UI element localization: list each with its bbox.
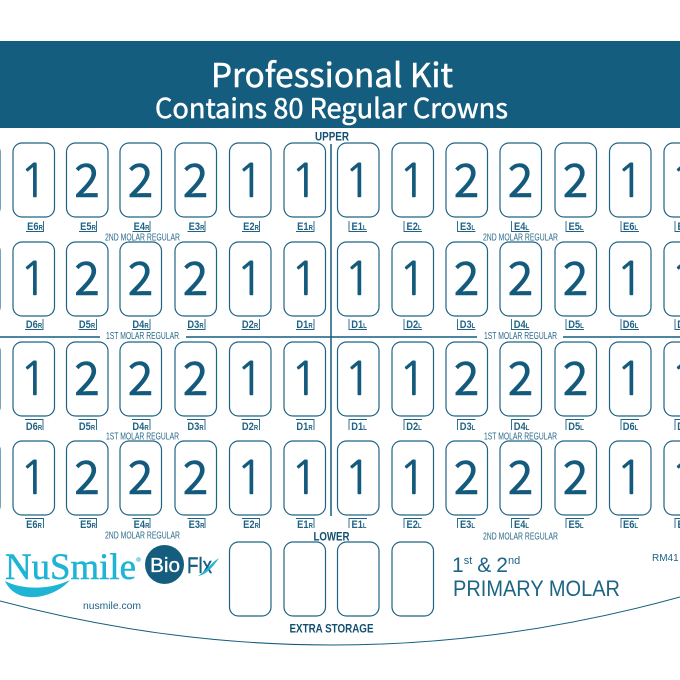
slot D2L: D2L <box>406 421 422 433</box>
slot D4L: 2 <box>508 243 533 309</box>
slot E6L <box>610 143 651 233</box>
slot D6R: 1 <box>20 356 47 402</box>
logo: BioFlx: Flx <box>187 553 212 578</box>
slot E2R: E2R <box>243 221 259 233</box>
molar label row 1 left: 2ND MOLAR REGULAR <box>105 232 180 244</box>
slot E5R: 2 <box>74 145 100 211</box>
slot E3R: E3R <box>189 519 205 531</box>
slot D3R <box>175 242 216 331</box>
slot E5R: E5R <box>80 221 96 233</box>
slot D2R: 1 <box>236 356 264 402</box>
product heading: nd <box>508 555 520 567</box>
slot D3R: D3R <box>187 421 204 433</box>
slot E1L: E1L <box>351 221 367 233</box>
slot D5L: 2 <box>563 343 588 409</box>
slot E5L: E5L <box>568 519 584 531</box>
slot D4R: D4R <box>132 421 149 433</box>
slot E6R <box>13 441 54 531</box>
slot right partial <box>664 441 680 531</box>
slot D1R <box>284 342 326 433</box>
logo: NuSmile: NuSmile <box>5 547 136 588</box>
slot D2L: 1 <box>399 356 426 402</box>
slot E3L: 2 <box>454 442 479 508</box>
slot D4R <box>120 342 162 433</box>
header banner <box>0 41 680 128</box>
slot D4R <box>120 242 162 331</box>
slot D3L <box>446 242 488 331</box>
molar label row 4 left: 2ND MOLAR REGULAR <box>105 530 180 542</box>
slot E4R: 2 <box>128 442 153 508</box>
slot E3L: E3L <box>460 221 475 233</box>
slot E3L: 2 <box>454 145 479 211</box>
slot E6R: E6R <box>26 519 42 531</box>
slot E4R: E4R <box>134 519 150 531</box>
slot D5R <box>66 342 108 433</box>
slot E2L <box>392 441 434 531</box>
molar label row 4 right: 2ND MOLAR REGULAR <box>483 532 558 542</box>
slot D3R: 2 <box>183 243 208 309</box>
extra storage label: EXTRA STORAGE <box>290 622 374 636</box>
slot D5L <box>555 242 596 331</box>
slot E5L: 2 <box>563 145 588 211</box>
slot E3L: E3L <box>460 519 475 531</box>
slot E5R: E5R <box>80 519 96 531</box>
slot E4L: 2 <box>508 442 533 508</box>
slot E5R <box>66 143 108 233</box>
slot D1R: D1R <box>296 319 313 331</box>
slot E1R: E1R <box>297 519 313 531</box>
slot D2R <box>230 242 271 331</box>
slot E1L: 1 <box>344 455 372 501</box>
slot E5L <box>555 143 596 233</box>
slot E1L <box>338 441 379 531</box>
slot D4L: 2 <box>508 343 533 409</box>
slot D4L <box>500 242 542 331</box>
website: nusmile.com <box>83 601 141 612</box>
product heading <box>452 554 620 601</box>
slot E1L: 1 <box>344 158 372 204</box>
slot E5R: 2 <box>74 442 100 508</box>
slot D5R: D5R <box>79 421 95 433</box>
slot D1L <box>338 342 379 433</box>
slot D1L <box>338 242 379 331</box>
slot E6L: E6L <box>623 519 638 531</box>
slot D6R: 1 <box>20 256 47 302</box>
slot D6R: D6R <box>26 319 42 331</box>
slot D5R: 2 <box>74 343 100 409</box>
slot D2R: D2R <box>242 421 258 433</box>
slot D6R: D6R <box>26 421 42 433</box>
slot D1L: D1L <box>351 421 367 433</box>
slot E4R <box>120 441 162 531</box>
slot D4R: D4R <box>132 319 149 331</box>
slot D4R: 2 <box>128 343 153 409</box>
slot E3L <box>446 143 488 233</box>
slot E2L: E2L <box>406 221 422 233</box>
slot E4R: 2 <box>128 145 153 211</box>
slot D1L: 1 <box>344 356 372 402</box>
slot E2L <box>392 143 434 233</box>
slot D5R: D5R <box>79 319 95 331</box>
slot E4L <box>500 441 542 531</box>
molar label row 3 left: 1ST MOLAR REGULAR <box>106 432 179 442</box>
slot E2R <box>230 441 271 531</box>
row 1: E upper <box>0 143 680 233</box>
slot D3R: 2 <box>183 343 208 409</box>
molar label row 2 left: 1ST MOLAR REGULAR <box>106 331 179 342</box>
slot D4L: D4L <box>514 421 529 433</box>
slot D2L <box>392 342 434 433</box>
logo: BioFlx <box>145 545 219 584</box>
slot E6L: 1 <box>616 455 644 501</box>
slot E3R: 2 <box>183 145 208 211</box>
slot D6L: D6L <box>623 421 638 433</box>
slot D6L: D6L <box>623 319 638 331</box>
slot E4L: E4L <box>514 519 529 531</box>
slot E4R <box>120 143 162 233</box>
slot E5R <box>66 441 108 531</box>
slot E3R <box>175 441 216 531</box>
slot E2L: 1 <box>399 455 426 501</box>
slot D2L <box>392 242 434 331</box>
slot D6R <box>13 342 54 433</box>
slot E3R: E3R <box>189 221 205 233</box>
slot D1R: D1R <box>296 421 313 433</box>
slot D5R <box>66 242 108 331</box>
slot E3L <box>446 441 488 531</box>
subtitle: Contains 80 Regular Crowns <box>155 87 508 126</box>
slot E1R <box>284 441 326 531</box>
primary molar: PRIMARY MOLAR <box>453 576 620 601</box>
slot D4L: D4L <box>514 319 529 331</box>
product heading: st <box>464 555 472 567</box>
lower label: LOWER <box>314 530 350 544</box>
slot D5L: 2 <box>563 243 588 309</box>
slot E6L: 1 <box>616 158 644 204</box>
slot E5L: 2 <box>563 442 588 508</box>
slot D2R: D2R <box>242 319 258 331</box>
slot D2L: D2L <box>406 319 422 331</box>
slot D2R: 1 <box>236 256 264 302</box>
slot D6L <box>610 242 651 331</box>
slot right partial <box>664 242 680 331</box>
slot D3L: D3L <box>460 319 475 331</box>
slot right partial <box>664 342 680 433</box>
slot E4R: E4R <box>134 221 150 233</box>
bottom curve <box>0 597 680 645</box>
slot E4L: 2 <box>508 145 533 211</box>
slot E6L: E6L <box>623 221 638 233</box>
slot E2L: 1 <box>399 158 426 204</box>
slot D4L <box>500 342 542 433</box>
slot E5L: E5L <box>568 221 584 233</box>
slot E6R: 1 <box>20 455 47 501</box>
slot D5R: 2 <box>74 243 100 309</box>
registered mark <box>136 557 141 562</box>
slot D5L: D5L <box>568 421 584 433</box>
slot E1R: 1 <box>291 455 318 501</box>
slot D3L <box>446 342 488 433</box>
slot D4R: 2 <box>128 243 153 309</box>
slot D6L: 1 <box>616 256 644 302</box>
slot E1L <box>338 143 379 233</box>
product heading: 2 <box>496 554 508 577</box>
molar label row 3 right: 1ST MOLAR REGULAR <box>484 432 557 442</box>
slot E3R: 2 <box>183 442 208 508</box>
slot right partial <box>664 143 680 233</box>
slot E3R <box>175 143 216 233</box>
row 3: D lower <box>0 342 680 433</box>
row 4: E lower <box>0 441 680 531</box>
slot E2R: E2R <box>243 519 259 531</box>
slot D1R: 1 <box>291 356 318 402</box>
slot E1L: E1L <box>351 519 367 531</box>
slot E1R: E1R <box>297 221 313 233</box>
slot D1L: D1L <box>351 319 367 331</box>
title: Professional Kit <box>211 49 453 97</box>
slot D3L: D3L <box>460 421 475 433</box>
logo smile swoosh <box>5 580 70 597</box>
slot D2R <box>230 342 271 433</box>
slot E6R: 1 <box>20 158 47 204</box>
slot E1R <box>284 143 326 233</box>
molar label row 1 right: 2ND MOLAR REGULAR <box>483 232 558 244</box>
upper label: UPPER <box>315 130 349 144</box>
slot E2R: 1 <box>236 158 264 204</box>
slot D5L: D5L <box>568 319 584 331</box>
slot E2L: E2L <box>406 519 422 531</box>
slot D1R <box>284 242 326 331</box>
slot D1R: 1 <box>291 256 318 302</box>
extra storage slots <box>230 542 434 616</box>
slot E4L: E4L <box>514 221 529 233</box>
quadrant dividers <box>0 144 680 516</box>
slot D3R <box>175 342 216 433</box>
product heading: 1 <box>452 554 464 577</box>
slot E2R: 1 <box>236 455 264 501</box>
slot D3R: D3R <box>187 319 204 331</box>
slot E5L <box>555 441 596 531</box>
logo: BioFlx: Bio <box>150 555 180 577</box>
slot E4L <box>500 143 542 233</box>
slot D6L <box>610 342 651 433</box>
slot D6R <box>13 242 54 331</box>
slot D2L: 1 <box>399 256 426 302</box>
slot D6L: 1 <box>616 356 644 402</box>
slot D3L: 2 <box>454 343 479 409</box>
product code: RM41 <box>652 553 679 564</box>
slot D5L <box>555 342 596 433</box>
slot E1R: 1 <box>291 158 318 204</box>
slot D1L: 1 <box>344 256 372 302</box>
product heading: & <box>477 554 491 577</box>
row 2: D upper <box>0 242 680 331</box>
slot E6L <box>610 441 651 531</box>
slot E6R <box>13 143 54 233</box>
slot D3L: 2 <box>454 243 479 309</box>
slot E2R <box>230 143 271 233</box>
slot E6R: E6R <box>27 221 43 233</box>
molar label row 2 right: 1ST MOLAR REGULAR <box>484 331 557 342</box>
